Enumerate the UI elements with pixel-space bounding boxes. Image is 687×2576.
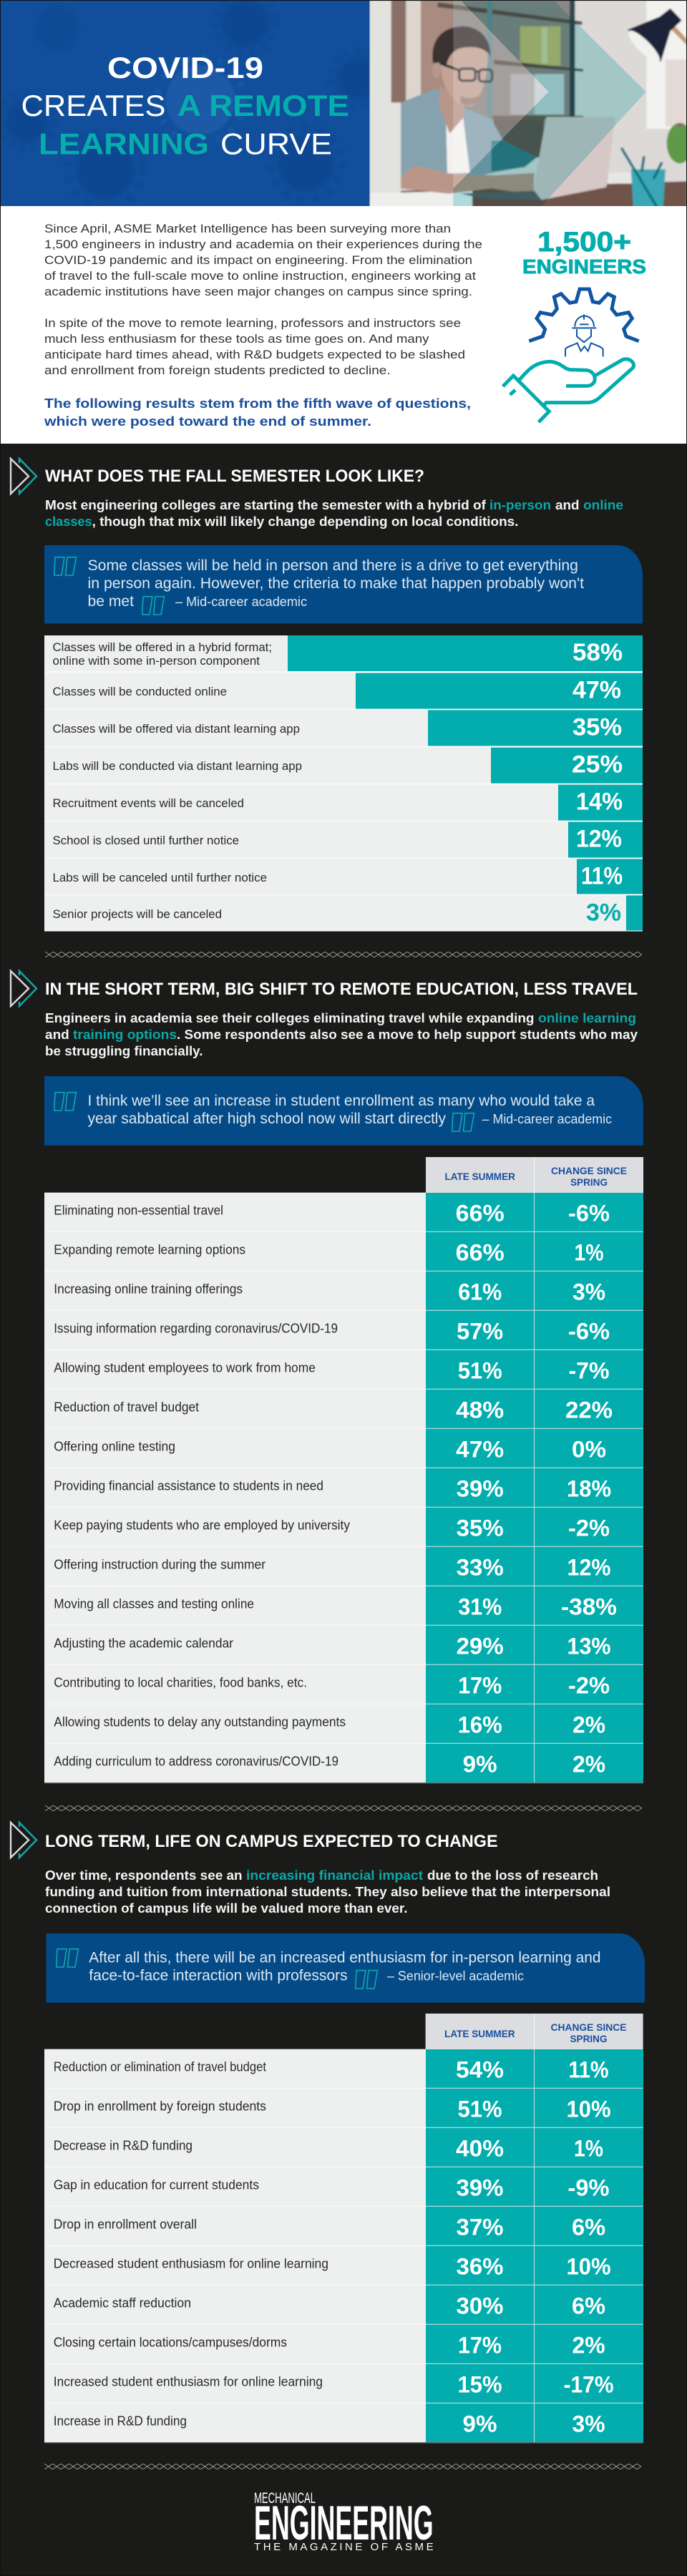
- row: enrollment overall: 6%: [572, 2214, 605, 2240]
- row: remote learning options: 66%: [456, 1240, 505, 1266]
- intro text: academic institutions have seen major changes on campus since spring.: [44, 285, 472, 298]
- intro text: 1,500 engineers in industry and academia on their experiences during the: [44, 238, 482, 251]
- quote box: [44, 545, 643, 624]
- laptop: [533, 117, 615, 200]
- row: foreign students: 10%: [567, 2097, 611, 2122]
- icon: section chevron: [11, 971, 36, 1006]
- bar: conducted online: [44, 673, 643, 708]
- quote box: – Mid-career academic: [175, 595, 307, 609]
- row: increase in R&D: 9%: [462, 2411, 497, 2437]
- row: staff reduction: [44, 2285, 643, 2325]
- bar: recruitment: Recruitment events will be canceled: [53, 796, 244, 810]
- hero banner: [0, 0, 687, 208]
- row: work from home: Allowing student employees to work from home: [54, 1361, 316, 1375]
- row: online testing: [44, 1429, 643, 1468]
- quote box: year sabbatical after high school now will start directly: [87, 1111, 446, 1127]
- intro highlighted note: [44, 396, 471, 429]
- quote box: Some classes will be held in person and there is a drive to get everything: [87, 557, 578, 574]
- row: summer instruction: 33%: [457, 1555, 504, 1581]
- row: increase in R&D: Increase in R&D funding: [54, 2414, 187, 2428]
- table header: SPRING: [570, 1176, 608, 1188]
- row: enrollment overall: 37%: [457, 2214, 504, 2240]
- row: summer instruction: 12%: [567, 1555, 611, 1581]
- intro text: Since April, ASME Market Intelligence has been surveying more than: [44, 222, 451, 235]
- quote box: be met: [87, 593, 134, 610]
- hero title: LEARNING: [39, 127, 209, 160]
- row: travel budget: 22%: [565, 1397, 613, 1423]
- bar chart: [44, 635, 643, 932]
- row: foreign students: 51%: [458, 2097, 502, 2122]
- row: paying students: -2%: [568, 1516, 610, 1541]
- row: moving online: -38%: [561, 1594, 617, 1620]
- section 1: fall semester: [11, 459, 643, 932]
- bar: labs via app: [44, 748, 643, 784]
- row: decreased enthusiasm: 36%: [457, 2254, 504, 2280]
- bar: classes via app: Classes will be offered via distant learning app: [53, 722, 300, 736]
- row: closing locations: 2%: [572, 2333, 605, 2358]
- row: local charities: [44, 1665, 643, 1704]
- logo: Mechanical Engineering: THE MAGAZINE OF ASME: [254, 2541, 434, 2553]
- row: delay payments: Allowing students to delay any outstanding payments: [54, 1715, 346, 1729]
- hero blue panel with virus texture: [0, 0, 385, 207]
- row: closing locations: [44, 2325, 643, 2364]
- row: curriculum: 2%: [572, 1752, 605, 1777]
- row: education gap: Gap in education for current students: [54, 2177, 259, 2192]
- row: travel budget elimination: 11%: [568, 2057, 608, 2082]
- bar: school closed: [44, 821, 643, 857]
- row: issuing information: Issuing information regarding coronavirus/COVID-19: [54, 1322, 338, 1336]
- data table: [44, 1157, 643, 1783]
- icon: section chevron: [11, 1823, 36, 1858]
- table header: [426, 1157, 643, 1193]
- hero photo: student at laptop: [369, 0, 687, 208]
- row: increased enthusiasm: -17%: [564, 2371, 614, 2397]
- bar: senior projects: 3%: [586, 899, 621, 926]
- lamp: [671, 26, 687, 45]
- section intro: due to the loss of research: [427, 1868, 598, 1883]
- row: decreased enthusiasm: Decreased student enthusiasm for online learning: [54, 2256, 328, 2270]
- row: closing locations: Closing certain locations/campuses/dorms: [54, 2335, 287, 2349]
- row: decreased enthusiasm: 10%: [567, 2254, 611, 2280]
- bar: school closed: 12%: [576, 826, 622, 853]
- quote box: – Senior-level academic: [387, 1969, 524, 1984]
- row: enrollment overall: Drop in enrollment overall: [54, 2217, 197, 2231]
- hero title: CURVE: [220, 127, 332, 160]
- section intro: in-person: [489, 498, 551, 512]
- quote box: [44, 1076, 643, 1146]
- row: academic calendar: [44, 1626, 643, 1665]
- bar: classes via app: 35%: [572, 713, 622, 741]
- table header: SPRING: [570, 2033, 608, 2044]
- intro highlighted note: The following results stem from the fifth wave of questions,: [44, 396, 471, 411]
- row: academic calendar: Adjusting the academic calendar: [54, 1636, 233, 1651]
- row: increased enthusiasm: 15%: [458, 2371, 502, 2397]
- row: increased enthusiasm: [44, 2364, 643, 2404]
- row: summer instruction: [44, 1547, 643, 1586]
- table header: CHANGE SINCE: [551, 1165, 627, 1176]
- section intro: and: [555, 498, 580, 512]
- row: issuing information: [44, 1311, 643, 1350]
- section intro: [45, 498, 623, 529]
- row: financial assistance: 18%: [567, 1476, 611, 1502]
- quote box: I think we’ll see an increase in student enrollment as many who would take a: [87, 1093, 595, 1109]
- row: local charities: -2%: [568, 1673, 610, 1699]
- row: travel budget elimination: 54%: [456, 2057, 504, 2082]
- row: online training: Increasing online training offerings: [54, 1282, 243, 1297]
- intro highlighted note: which were posed toward the end of summer.: [44, 414, 371, 429]
- row: staff reduction: 30%: [457, 2293, 504, 2318]
- 1,500+ engineers stat: 1,500+: [537, 227, 631, 258]
- row: enrollment overall: [44, 2207, 643, 2246]
- row: remote learning options: Expanding remote learning options: [54, 1243, 245, 1257]
- row: summer instruction: Offering instruction during the summer: [54, 1558, 265, 1572]
- bar: classes via app: [44, 710, 643, 746]
- row: paying students: [44, 1508, 643, 1547]
- row: travel budget: [44, 1390, 643, 1429]
- section intro: Most engineering colleges are starting the semester with a hybrid of: [45, 498, 487, 512]
- table header: LATE SUMMER: [444, 1171, 515, 1182]
- quote box: in person again. However, the criteria to make that happen probably won't: [87, 575, 584, 592]
- row: foreign students: [44, 2089, 643, 2128]
- section intro: [45, 1868, 610, 1916]
- bar: hybrid format: online with some in-person component: [53, 654, 260, 668]
- teal chevron overlay: [453, 0, 646, 206]
- section intro: online: [583, 498, 623, 512]
- row: delay payments: 16%: [458, 1712, 502, 1738]
- bar: conducted online: 47%: [572, 677, 621, 704]
- row: increased enthusiasm: Increased student enthusiasm for online learning: [54, 2374, 323, 2389]
- row: academic calendar: 13%: [567, 1634, 611, 1659]
- row: education gap: -9%: [568, 2175, 610, 2201]
- intro text: much less enthusiasm for these tools as time goes on. And many: [44, 332, 429, 346]
- intro text: anticipate hard times ahead, with R&D budgets expected to be slashed: [44, 348, 465, 361]
- row: decrease in R&D: Decrease in R&D funding: [54, 2138, 193, 2152]
- row: moving online: 31%: [458, 1594, 502, 1620]
- row: travel budget: 48%: [456, 1397, 504, 1423]
- row: decreased enthusiasm: [44, 2246, 643, 2285]
- row: online testing: Offering online testing: [54, 1440, 175, 1454]
- intro text: In spite of the move to remote learning, professors and instructors see: [44, 316, 461, 330]
- torso: [399, 87, 517, 177]
- section intro: Engineers in academia see their colleges eliminating travel while expanding: [45, 1011, 534, 1025]
- section intro: and: [45, 1028, 69, 1042]
- row: financial assistance: [44, 1468, 643, 1508]
- bar: labs via app: Labs will be conducted via distant learning app: [53, 759, 302, 773]
- row: online training: [44, 1272, 643, 1311]
- row: increase in R&D: [44, 2404, 643, 2443]
- row: delay payments: [44, 1704, 643, 1744]
- section heading: WHAT DOES THE FALL SEMESTER LOOK LIKE?: [45, 467, 424, 486]
- bar: recruitment: [44, 785, 643, 821]
- row: local charities: 17%: [458, 1673, 502, 1699]
- section intro: be struggling financially.: [45, 1044, 203, 1058]
- row: travel budget elimination: Reduction or elimination of travel budget: [54, 2059, 266, 2074]
- row: staff reduction: Academic staff reduction: [54, 2296, 191, 2310]
- row: curriculum: [44, 1744, 643, 1783]
- hero title: [21, 51, 349, 160]
- row: staff reduction: 6%: [572, 2293, 605, 2318]
- row: online testing: 0%: [572, 1437, 606, 1463]
- bar: labs canceled: [44, 859, 643, 894]
- bar: hybrid format: [44, 635, 643, 671]
- section heading: IN THE SHORT TERM, BIG SHIFT TO REMOTE EDUCATION, LESS TRAVEL: [45, 980, 638, 999]
- hero title: COVID-19: [107, 51, 263, 84]
- table header: LATE SUMMER: [444, 2028, 515, 2039]
- row: work from home: 51%: [458, 1358, 502, 1384]
- row: online training: 61%: [458, 1279, 502, 1305]
- bar: senior projects: Senior projects will be canceled: [53, 907, 222, 921]
- table header: [426, 2014, 643, 2049]
- row: education gap: [44, 2167, 643, 2207]
- row: non-essential travel: Eliminating non-essential travel: [54, 1204, 223, 1218]
- section intro: [45, 1011, 638, 1058]
- row: financial assistance: Providing financial assistance to students in need: [54, 1479, 323, 1493]
- hero title: A REMOTE: [177, 89, 349, 122]
- logo: Mechanical Engineering: ENGINEERING: [254, 2496, 434, 2550]
- row: work from home: [44, 1350, 643, 1390]
- intro text: COVID-19 pandemic and its impact on engineering. From the elimination: [44, 253, 472, 267]
- section 3: long term: [11, 1823, 645, 2443]
- row: decrease in R&D: [44, 2128, 643, 2167]
- row: online training: 3%: [572, 1279, 605, 1305]
- plant: [667, 123, 687, 163]
- row: remote learning options: [44, 1232, 643, 1272]
- icon: section chevron: [11, 459, 36, 494]
- 1,500+ engineers stat: [522, 227, 646, 278]
- row: curriculum: Adding curriculum to address coronavirus/COVID-19: [54, 1755, 338, 1769]
- row: increase in R&D: 3%: [572, 2411, 605, 2437]
- section intro: connection of campus life will be valued more than ever.: [45, 1901, 408, 1916]
- row: academic calendar: 29%: [457, 1634, 504, 1659]
- logo: Mechanical Engineering: MECHANICAL: [254, 2490, 316, 2507]
- row: financial assistance: 39%: [457, 1476, 504, 1502]
- intro text: [44, 222, 482, 377]
- 1,500+ engineers stat: ENGINEERS: [522, 255, 646, 278]
- hero title: CREATES: [21, 89, 166, 122]
- bar: labs canceled: 11%: [581, 862, 623, 889]
- desk: [401, 181, 687, 208]
- section heading: LONG TERM, LIFE ON CAMPUS EXPECTED TO CHANGE: [45, 1832, 498, 1851]
- row: remote learning options: 1%: [574, 1240, 604, 1266]
- bar: hybrid format: Classes will be offered in a hybrid format;: [53, 640, 272, 654]
- bar: labs canceled: Labs will be canceled until further notice: [53, 871, 267, 884]
- section intro: increasing financial impact: [246, 1868, 423, 1883]
- row: issuing information: -6%: [568, 1319, 610, 1345]
- row: paying students: 35%: [457, 1516, 504, 1541]
- bar: labs via app: 25%: [572, 751, 623, 779]
- row: travel budget: Reduction of travel budget: [54, 1400, 199, 1415]
- section intro: Over time, respondents see an: [45, 1868, 243, 1883]
- row: foreign students: Drop in enrollment by foreign students: [54, 2099, 266, 2113]
- row: decrease in R&D: 1%: [574, 2135, 603, 2161]
- row: decrease in R&D: 40%: [456, 2135, 504, 2161]
- row: education gap: 39%: [457, 2175, 504, 2201]
- bar: recruitment: 14%: [576, 789, 623, 816]
- quote box: face-to-face interaction with professors: [89, 1968, 348, 1984]
- row: moving online: Moving all classes and testing online: [54, 1597, 254, 1611]
- logo: Mechanical Engineering: [254, 2490, 434, 2553]
- intro text: of travel to the full-scale move to online instruction, engineers working at: [44, 269, 476, 283]
- quote box: – Mid-career academic: [482, 1112, 612, 1126]
- row: moving online: [44, 1586, 643, 1626]
- pencil cup: [631, 170, 666, 208]
- row: work from home: -7%: [568, 1358, 610, 1384]
- quote box: After all this, there will be an increased enthusiasm for in-person learning and: [89, 1950, 601, 1966]
- section intro: . Some respondents also see a move to help support students who may: [177, 1028, 638, 1042]
- row: travel budget elimination: [44, 2049, 643, 2089]
- table header: CHANGE SINCE: [551, 2021, 627, 2033]
- section intro: funding and tuition from international students. They also believe that the interpersonal: [45, 1885, 610, 1899]
- row: delay payments: 2%: [572, 1712, 605, 1738]
- bar: hybrid format: 58%: [572, 639, 623, 666]
- section intro: classes: [45, 514, 92, 529]
- section intro: online learning: [538, 1011, 636, 1025]
- data table: [44, 2014, 643, 2443]
- row: non-essential travel: [44, 1193, 643, 1232]
- section 2: short term: [11, 971, 643, 1783]
- row: local charities: Contributing to local charities, food banks, etc.: [54, 1676, 307, 1690]
- intro panel: [1, 206, 686, 444]
- row: issuing information: 57%: [457, 1319, 503, 1345]
- row: curriculum: 9%: [463, 1752, 497, 1777]
- row: paying students: Keep paying students who are employed by university: [54, 1518, 350, 1533]
- quote box: [46, 1933, 645, 2003]
- section intro: training options: [73, 1028, 177, 1042]
- row: non-essential travel: -6%: [568, 1201, 610, 1226]
- row: online testing: 47%: [456, 1437, 504, 1463]
- row: closing locations: 17%: [458, 2333, 502, 2358]
- bar: school closed: School is closed until further notice: [53, 834, 239, 847]
- icon: gear, engineer and hand: [503, 289, 639, 422]
- section intro: , though that mix will likely change depending on local conditions.: [92, 514, 518, 529]
- bar: senior projects: [44, 895, 643, 930]
- row: non-essential travel: 66%: [456, 1201, 505, 1226]
- bar: conducted online: Classes will be conducted online: [53, 685, 227, 698]
- intro text: and enrollment from foreign students predicted to decline.: [44, 364, 391, 377]
